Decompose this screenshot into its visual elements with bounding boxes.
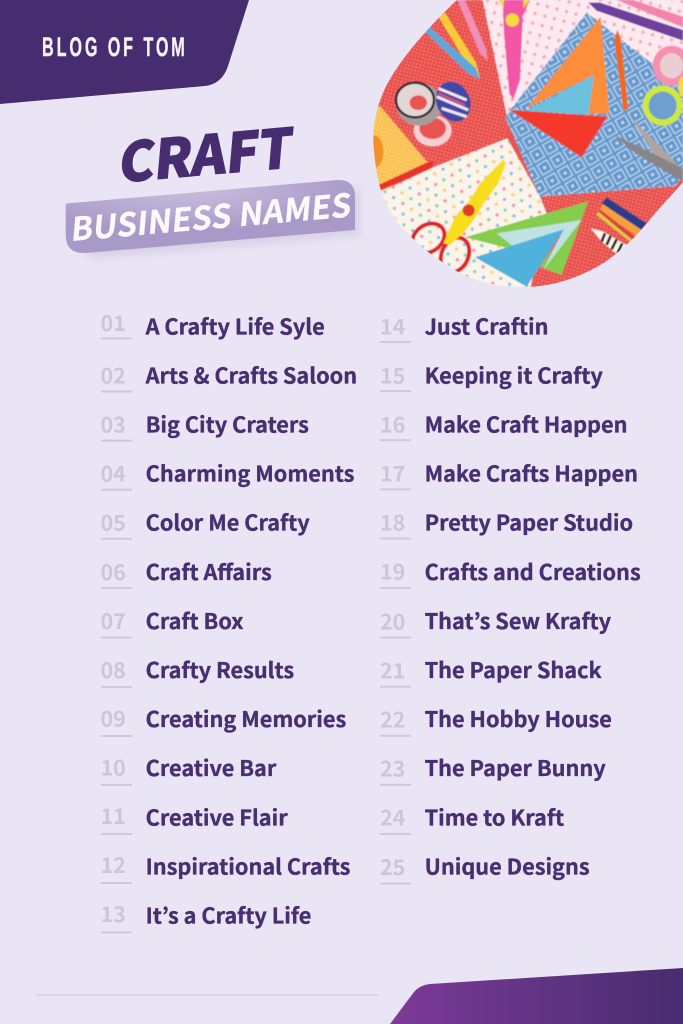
item 13 xyxy=(100,898,311,934)
item 24: 24 xyxy=(380,802,406,833)
pink scissor blade xyxy=(503,0,529,99)
item 25: 25 xyxy=(380,851,405,882)
item 10 xyxy=(100,752,277,786)
orange pencil xyxy=(614,29,628,110)
item 07: Craft Box xyxy=(146,605,243,636)
item 11: Creative Flair xyxy=(146,801,288,832)
yellow zigzag scissors xyxy=(443,159,506,245)
pencil: pink xyxy=(457,0,487,61)
item 12: Inspirational Crafts xyxy=(146,850,351,881)
tape: glitter xyxy=(396,83,442,126)
coloured pencils xyxy=(597,197,647,242)
item 05: Color Me Crafty xyxy=(146,507,310,538)
item 18: 18 xyxy=(380,507,405,538)
paper: yellow xyxy=(370,107,428,193)
item 24: Time to Kraft xyxy=(425,801,564,832)
paper: top right pink xyxy=(586,0,683,64)
name list: right column xyxy=(380,310,641,884)
item 06 xyxy=(100,556,272,589)
red scissor handles xyxy=(410,220,472,273)
item 02: Arts & Crafts Saloon xyxy=(145,359,357,390)
yellow tape edge xyxy=(678,77,683,97)
item 22: The Hobby House xyxy=(425,703,612,734)
subtitle ribbon: business names xyxy=(66,180,360,259)
item 17: 17 xyxy=(380,458,405,488)
item 19: 19 xyxy=(380,556,405,587)
item 14 xyxy=(380,310,549,343)
item 14: Just Craftin xyxy=(425,310,549,341)
item 12: 12 xyxy=(100,849,126,880)
title: CRAFT: CRAFT xyxy=(117,104,297,199)
item 18: Pretty Paper Studio xyxy=(425,507,633,538)
item 01: A Crafty Life Syle xyxy=(145,310,325,341)
green triangle xyxy=(465,201,588,275)
item 15: Keeping it Crafty xyxy=(425,359,603,390)
item 16: 16 xyxy=(380,408,405,439)
item 25: Unique Designs xyxy=(425,850,590,881)
item 11 xyxy=(100,800,288,835)
item 21: 21 xyxy=(380,654,405,685)
subtitle text: BUSINESS NAMES xyxy=(70,180,354,251)
red pencil xyxy=(378,162,435,191)
item 07 xyxy=(100,605,243,638)
pencil: blue xyxy=(425,27,480,79)
name list: left column xyxy=(100,307,357,934)
item 03: Big City Craters xyxy=(146,409,309,440)
top banner xyxy=(0,0,249,104)
item 04: 04 xyxy=(100,458,126,489)
silver scissors xyxy=(613,116,683,182)
item 02: 02 xyxy=(100,360,126,390)
craft supplies photo in blob xyxy=(367,0,683,295)
item 08: Crafty Results xyxy=(146,654,294,685)
pale stripe xyxy=(497,220,582,270)
orange fruit shape xyxy=(373,135,384,168)
item 17: Make Crafts Happen xyxy=(425,458,638,489)
item 20: 20 xyxy=(380,605,405,636)
item 14: 14 xyxy=(380,310,406,341)
item 10: 10 xyxy=(100,752,126,782)
footer rule xyxy=(36,994,378,996)
item 08 xyxy=(100,654,294,688)
item 13: 13 xyxy=(100,898,126,929)
footer corner shape xyxy=(390,968,683,1024)
light blue triangle xyxy=(527,75,594,115)
item 06: Craft Affairs xyxy=(146,556,272,587)
orange triangle xyxy=(527,17,609,114)
pencil: yellow xyxy=(438,13,480,79)
item 07: 07 xyxy=(100,605,126,636)
item 13: It’s a Crafty Life xyxy=(146,900,311,931)
striped pencil xyxy=(591,228,627,257)
yellow handle tips xyxy=(498,0,529,8)
item 22: 22 xyxy=(380,703,405,734)
item 03: 03 xyxy=(100,408,126,440)
item 23: 23 xyxy=(380,752,405,784)
item 01: 01 xyxy=(100,307,126,338)
item 09: 09 xyxy=(100,702,126,734)
pencil: pink top xyxy=(617,0,683,27)
brand name: BLOG OF TOM xyxy=(42,32,185,62)
paper: blue diamonds xyxy=(505,13,683,197)
blue triangle xyxy=(475,229,564,287)
item 20: That’s Sew Krafty xyxy=(425,605,612,636)
tape: lime xyxy=(643,86,683,126)
item 05: 05 xyxy=(100,507,126,538)
tape: clear pink xyxy=(414,115,452,146)
item 08: 08 xyxy=(100,654,126,685)
paper: red dotted xyxy=(370,0,507,168)
item 10: Creative Bar xyxy=(146,752,277,783)
item 16: Make Craft Happen xyxy=(425,409,628,440)
tape: pink xyxy=(653,46,683,86)
scissor dot xyxy=(506,13,519,27)
pencil: patterned xyxy=(588,3,683,41)
paper: pink dotted xyxy=(483,0,590,115)
red triangle xyxy=(510,110,607,157)
item 21: The Paper Shack xyxy=(425,654,602,685)
item 24 xyxy=(380,801,564,835)
tape: striped xyxy=(435,81,472,122)
item 09: Creating Memories xyxy=(146,703,346,734)
item 23: The Paper Bunny xyxy=(425,752,606,783)
item 06: 06 xyxy=(100,556,126,587)
item 19: Crafts and Creations xyxy=(425,556,641,587)
item 04: Charming Moments xyxy=(146,458,355,489)
paper: star print xyxy=(370,138,547,290)
scissor pivot xyxy=(463,204,475,216)
item 11: 11 xyxy=(100,800,126,831)
item 15: 15 xyxy=(380,359,405,390)
paper: red bottom xyxy=(530,186,677,290)
